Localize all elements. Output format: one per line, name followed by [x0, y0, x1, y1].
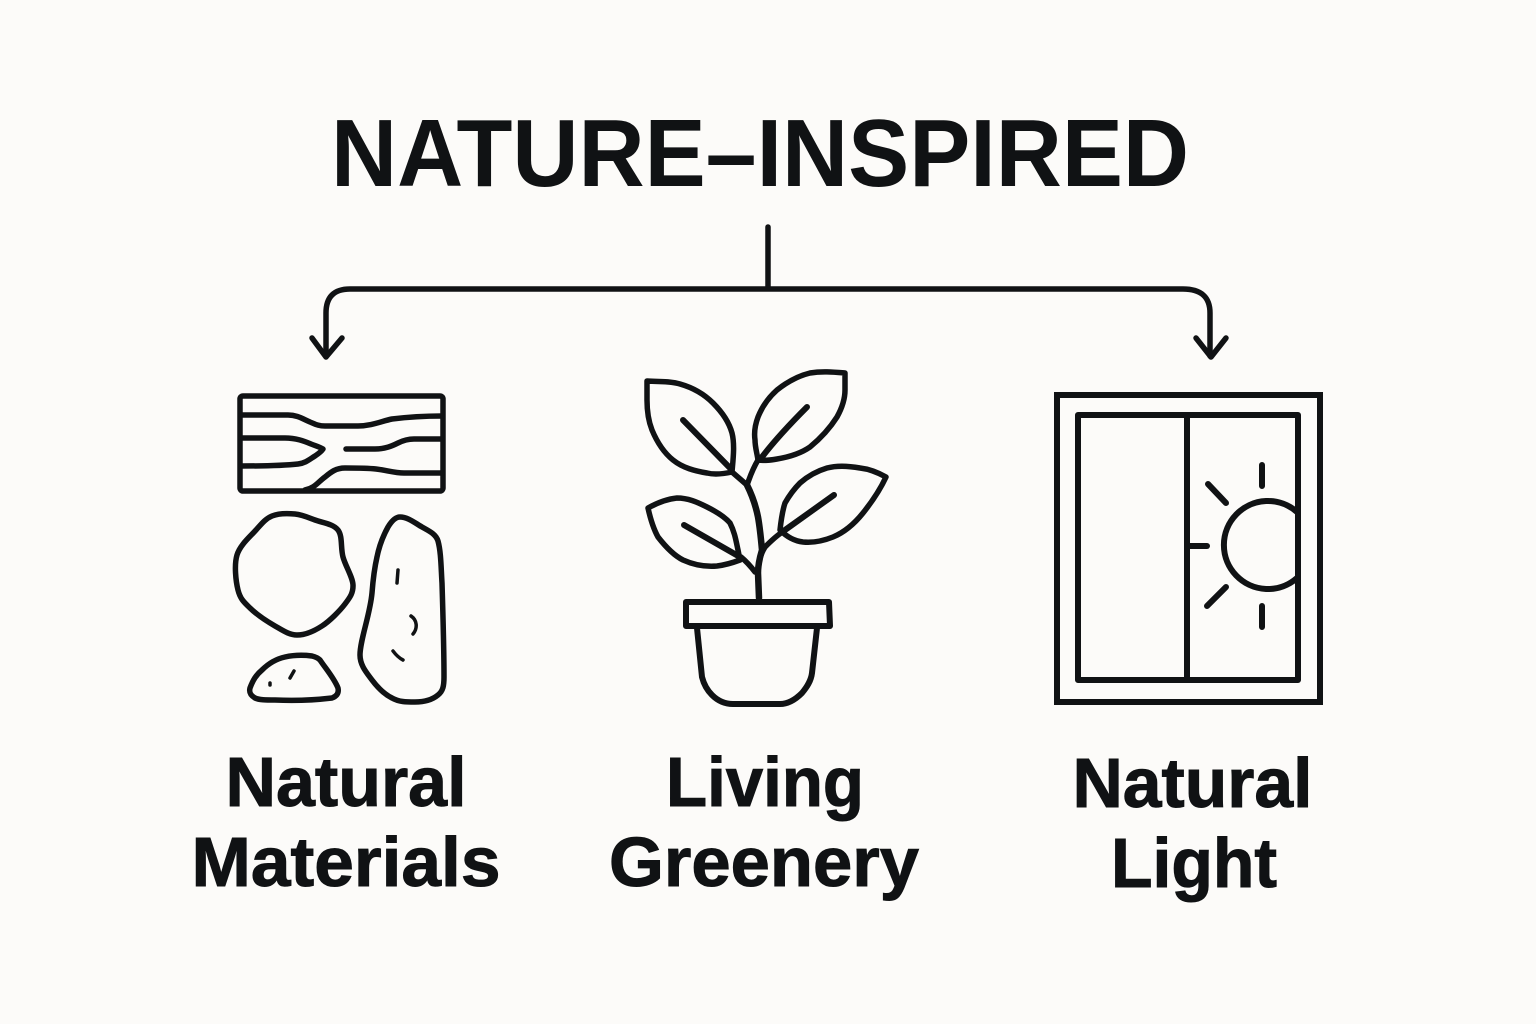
leaf top left: [647, 381, 734, 474]
label: natural light: Light: [1111, 824, 1277, 902]
title: NATURE–INSPIRED: [331, 100, 1189, 207]
tall stone: [360, 517, 444, 702]
pot: [686, 602, 830, 704]
vein lower right: [785, 495, 834, 530]
icon: window with sun: [1057, 395, 1320, 702]
stem: [747, 485, 762, 598]
leaf lower left: [648, 498, 740, 566]
leaf top right: [755, 372, 845, 460]
icon: natural materials: [235, 396, 444, 702]
small stone: [250, 655, 338, 700]
small stone marks: [270, 671, 294, 685]
round stone: [235, 514, 353, 635]
label: natural materials: Natural: [226, 743, 466, 821]
label: natural light: Natural: [1072, 744, 1312, 822]
stone marks: [393, 570, 416, 660]
icon: plant: [647, 372, 886, 704]
leaf lower right: [780, 466, 886, 542]
branches: [732, 460, 781, 573]
arrow connector: [312, 227, 1226, 357]
label: living greenery: Greenery: [609, 823, 919, 901]
wood plank: [240, 396, 443, 491]
vein top right: [762, 407, 807, 457]
label: natural materials: Materials: [192, 823, 500, 901]
vein lower left: [684, 525, 740, 557]
vein top left: [683, 420, 730, 468]
label: living greenery: Living: [666, 743, 864, 821]
